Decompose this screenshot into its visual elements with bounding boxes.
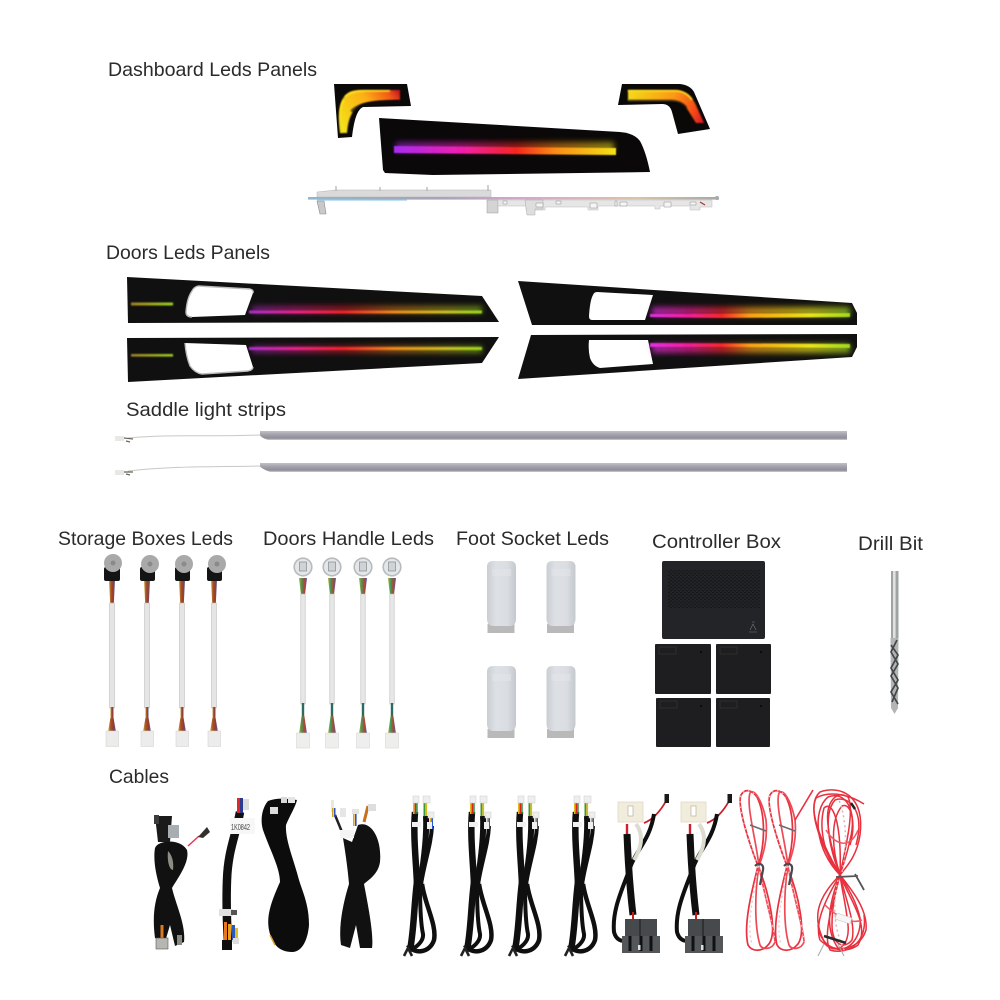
cable 1: main loom: [154, 815, 210, 949]
controller plate 1: [655, 644, 711, 694]
dashboard bracket: [308, 185, 719, 215]
heading: doors: Doors Leds Panels: [106, 242, 270, 264]
handle led 2: [323, 558, 341, 748]
foot socket 4: [546, 666, 576, 738]
cable 8: three-branch harness: [565, 796, 595, 956]
controller box parts: [655, 561, 771, 747]
foot socket leds: [487, 561, 576, 738]
door handle leds: [294, 558, 401, 748]
cable 4: branched harness: [331, 800, 380, 948]
cable 12: red twisted pair: [769, 790, 813, 950]
drill bit: [890, 571, 898, 714]
heading: cables: Cables: [109, 766, 169, 788]
cable 2: labelled harness: 1K0842: [231, 823, 250, 832]
controller plate 3: [656, 698, 711, 747]
saddle strip 1: [115, 431, 847, 442]
cable 2: labelled harness: [219, 798, 255, 950]
saddle strip 2: [115, 463, 847, 475]
heading: drill bit: Drill Bit: [858, 533, 924, 555]
controller plate 4: [716, 698, 770, 747]
dashboard right corner panel: [618, 84, 710, 134]
controller plate 2: [716, 644, 771, 694]
cable 3: coiled loom: [262, 797, 309, 952]
handle led 4: [383, 558, 401, 748]
dashboard left corner panel: [334, 84, 411, 138]
handle led 1: [294, 558, 312, 748]
storage led 2: [140, 555, 159, 746]
door panel: left bottom: [127, 337, 499, 382]
cable 6: three-branch harness: [461, 796, 491, 956]
controller lid: [662, 561, 765, 639]
storage led 4: [207, 555, 226, 746]
door panel: left top: [127, 277, 499, 323]
door panel: right top: [518, 281, 857, 325]
foot socket 1: [487, 561, 516, 633]
heading: dashboard: Dashboard Leds Panels: [108, 59, 317, 81]
heading: door handles: Doors Handle Leds: [263, 528, 434, 550]
cable 9: relay harness: [614, 794, 669, 953]
storage led 3: [175, 555, 193, 746]
heading: foot sockets: Foot Socket Leds: [456, 528, 609, 550]
cable 5: three-branch harness: [404, 796, 434, 956]
handle led 3: [354, 558, 372, 748]
cable 13: red twisted bundle: [814, 790, 866, 956]
cable 11: red twisted pair: [740, 791, 775, 950]
cable 7: three-branch harness: [509, 796, 539, 956]
cables: [154, 790, 866, 956]
heading: controller: Controller Box: [652, 531, 781, 553]
storage led 1: [104, 554, 122, 746]
storage box leds: [104, 554, 226, 746]
foot socket 2: [546, 561, 576, 633]
dashboard centre panel: [379, 118, 650, 175]
heading: saddle strips: Saddle light strips: [126, 399, 286, 421]
foot socket 3: [487, 666, 516, 738]
heading: storage boxes: Storage Boxes Leds: [58, 528, 233, 550]
door panel: right bottom: [518, 334, 857, 379]
cable 10: relay harness: [677, 794, 732, 953]
